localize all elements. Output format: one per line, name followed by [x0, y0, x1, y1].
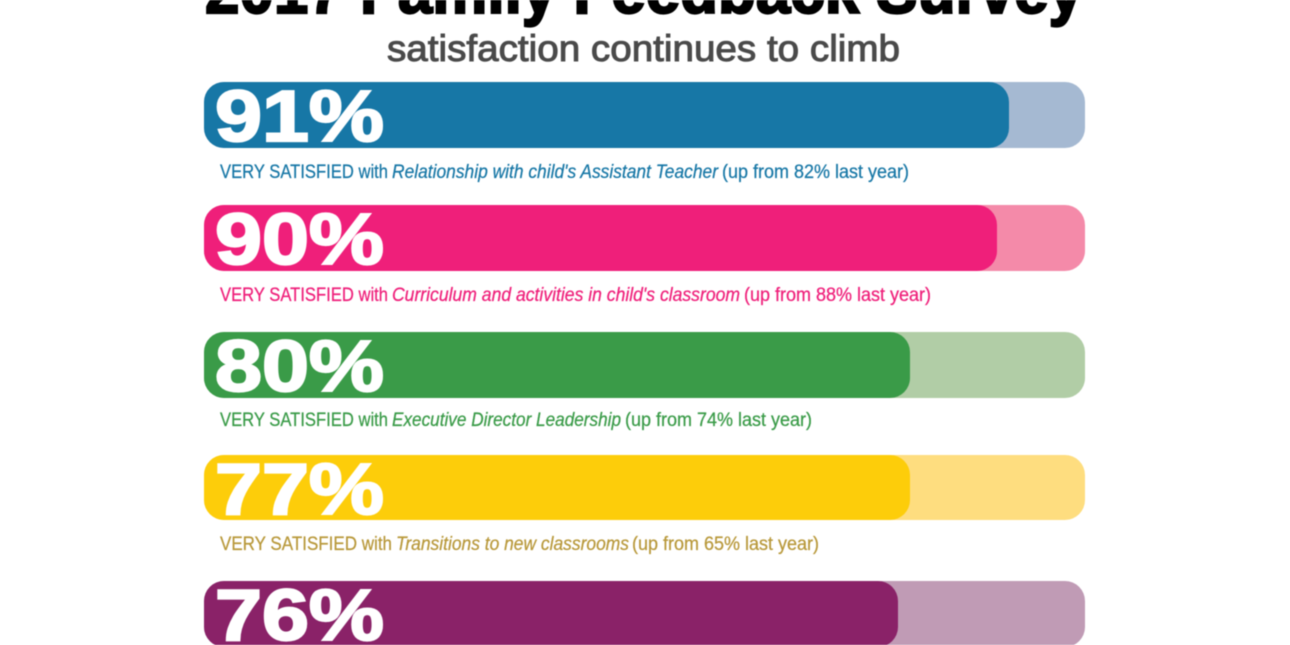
caption: executive director: [220, 410, 812, 431]
bar: 80%: [204, 327, 1085, 407]
bar: 80%: 80%: [215, 327, 384, 407]
caption: transitions: [220, 534, 819, 555]
bar: 76%: [204, 576, 1085, 645]
caption: executive director: (up from 74% last year): [625, 410, 812, 431]
bar: 91%: 91%: [215, 77, 384, 157]
bar: 90%: 90%: [215, 200, 384, 280]
caption: executive director: VERY SATISFIED with: [220, 410, 388, 431]
bar: 91%: [204, 77, 1085, 157]
caption: transitions: VERY SATISFIED with: [220, 534, 392, 555]
caption: curriculum: Curriculum and activities in child's classroom: [392, 285, 740, 306]
caption: assistant teacher: Relationship with child's Assistant Teacher: [392, 162, 719, 183]
caption: curriculum: (up from 88% last year): [744, 285, 931, 306]
caption: transitions: (up from 65% last year): [632, 534, 819, 555]
caption: assistant teacher: VERY SATISFIED with: [220, 162, 388, 183]
caption: assistant teacher: (up from 82% last year): [722, 162, 909, 183]
caption: executive director: Executive Director Leadership: [392, 410, 621, 431]
caption: assistant teacher: [220, 162, 909, 183]
bar: 77%: 77%: [215, 450, 384, 530]
bar: 77%: [204, 450, 1085, 530]
caption: curriculum: [220, 285, 931, 306]
bar: 90%: [204, 200, 1085, 280]
subtitle: satisfaction continues to climb: [387, 28, 900, 69]
caption: curriculum: VERY SATISFIED with: [220, 285, 388, 306]
caption: transitions: Transitions to new classrooms: [396, 534, 629, 555]
